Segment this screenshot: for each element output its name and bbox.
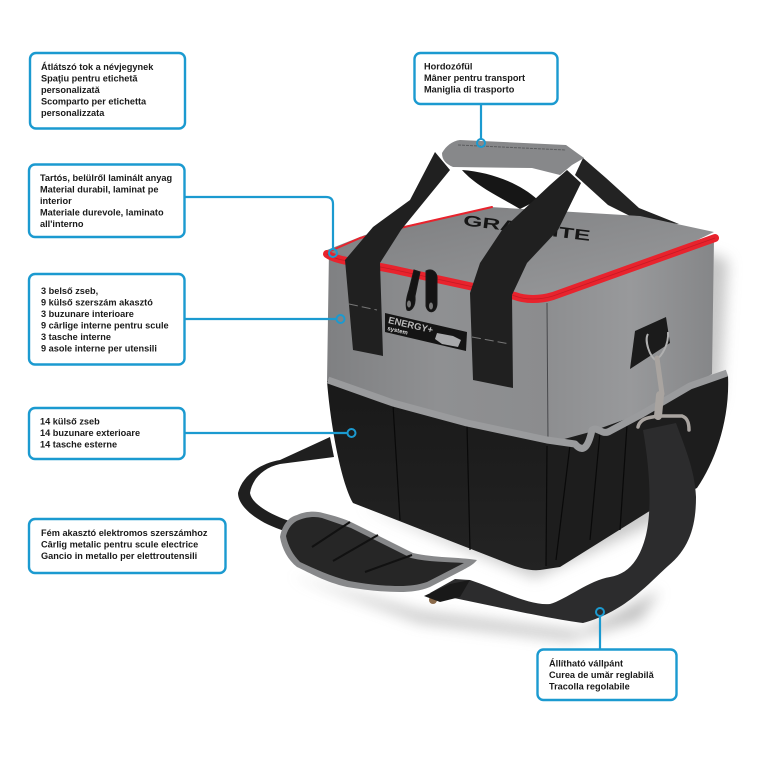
black front pockets bbox=[327, 381, 548, 570]
left strap loop bbox=[238, 437, 334, 531]
product photo: tool bag bbox=[238, 140, 728, 640]
zipper pulls bbox=[406, 270, 437, 312]
lid bbox=[327, 207, 714, 298]
callout: durable material: all'interno bbox=[40, 219, 84, 229]
brand badge: system bbox=[387, 326, 408, 337]
soft ground shadows bbox=[290, 250, 728, 640]
callout: adjustable shoulder strap: Tracolla regolabile bbox=[549, 682, 630, 692]
callout: outer pockets: 14 külső zseb bbox=[40, 416, 100, 426]
callout: metal hook: Fém akasztó elektromos szerszámhoz bbox=[41, 528, 208, 538]
callout: transparent name tag pocket bbox=[30, 53, 185, 128]
callout: carry handle: Hordozófül bbox=[424, 62, 472, 72]
callout: inner pockets: 3 tasche interne bbox=[41, 332, 111, 342]
callout: transparent name tag pocket: personalizată bbox=[41, 85, 101, 95]
callout: transparent name tag pocket: Átlátszó tok a névjegynek bbox=[41, 61, 154, 72]
callout: carry handle bbox=[414, 53, 558, 104]
callout: durable material: Materiale durevole, laminato bbox=[40, 208, 164, 218]
callout: metal hook: Gancio in metallo per elettroutensili bbox=[41, 551, 197, 561]
callout: carry handle: Mâner pentru transport bbox=[424, 73, 525, 83]
callout: outer pockets: 14 tasche esterne bbox=[40, 440, 117, 450]
callout: inner pockets: 3 belső zseb, bbox=[41, 286, 98, 296]
callout: metal hook: Cârlig metalic pentru scule electrice bbox=[41, 540, 198, 550]
callout: metal hook bbox=[29, 519, 226, 573]
callout: transparent name tag pocket: Spaţiu pentru etichetă bbox=[41, 74, 138, 84]
callout: durable material: Material durabil, laminat pe bbox=[40, 184, 158, 194]
grey pocket trim bbox=[328, 373, 727, 448]
back handle bbox=[462, 158, 679, 224]
shoulder pad bbox=[280, 512, 477, 604]
connector: durable material bbox=[185, 197, 337, 257]
bag body: side panel bbox=[547, 238, 714, 444]
callout: durable material bbox=[29, 164, 184, 237]
connector: inner pockets bbox=[185, 315, 344, 323]
callout: durable material: interior bbox=[40, 196, 72, 206]
connector: shoulder strap bbox=[596, 608, 604, 649]
callout: transparent name tag pocket: personalizzata bbox=[41, 108, 105, 118]
metal hook bbox=[638, 358, 689, 430]
callout: adjustable shoulder strap: Curea de umăr reglabilă bbox=[549, 670, 655, 680]
callout: transparent name tag pocket: Scomparto per etichetta bbox=[41, 96, 147, 106]
callout: adjustable shoulder strap bbox=[538, 650, 676, 700]
red zip piping bbox=[327, 207, 715, 299]
handle straps bbox=[345, 152, 581, 388]
callout: carry handle: Maniglia di trasporto bbox=[424, 84, 515, 94]
callout: inner pockets: 9 asole interne per utensili bbox=[41, 344, 157, 354]
shoulder strap right side bbox=[430, 423, 696, 623]
handle grip bbox=[442, 140, 584, 175]
callout: inner pockets: 9 cârlige interne pentru scule bbox=[41, 320, 169, 330]
black rear pockets bbox=[540, 376, 728, 570]
connector: outer pockets bbox=[185, 429, 356, 437]
callout: outer pockets: 14 buzunare exterioare bbox=[40, 428, 140, 438]
connector: carry handle bbox=[477, 104, 485, 147]
callout: outer pockets bbox=[29, 408, 184, 459]
callout: inner pockets bbox=[29, 274, 184, 364]
strap tab and ring bbox=[630, 317, 670, 369]
callout: inner pockets: 3 buzunare interioare bbox=[41, 309, 134, 319]
brand badge bbox=[385, 313, 467, 351]
logo on lid: GRAPHITE bbox=[462, 212, 591, 245]
bag body: front panel bbox=[327, 250, 549, 444]
callout: adjustable shoulder strap: Állítható vállpánt bbox=[549, 658, 623, 668]
callout: durable material: Tartós, belülről laminált anyag bbox=[40, 173, 172, 183]
brand badge: ENERGY+ bbox=[387, 315, 435, 336]
callout: inner pockets: 9 külső szerszám akasztó bbox=[41, 298, 153, 308]
